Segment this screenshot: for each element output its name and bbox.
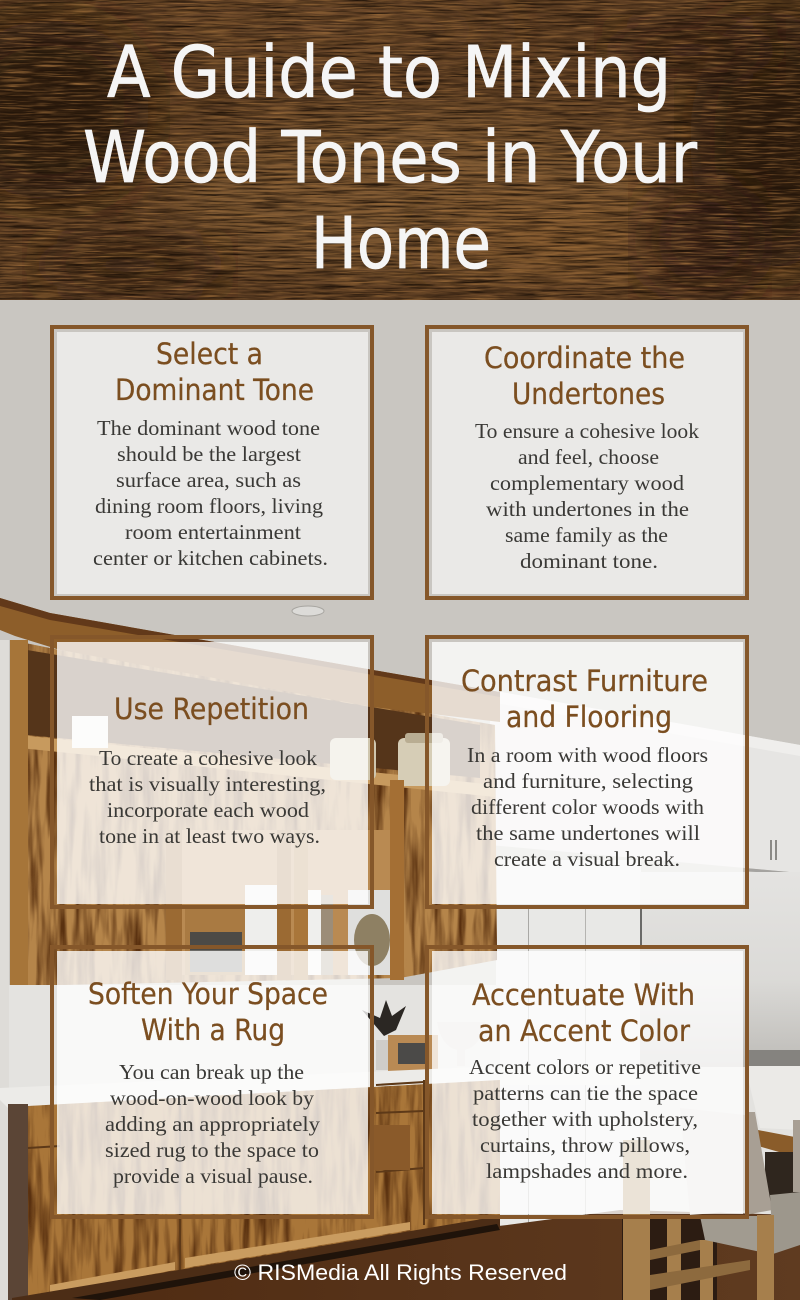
heading: Undertones [512, 377, 665, 411]
lower oak cabinet [0, 1070, 510, 1300]
title: Home [311, 202, 491, 285]
body text: create a visual break. [494, 847, 680, 871]
footer copyright: © RISMedia All Rights Reserved [234, 1260, 567, 1285]
panel: select a dominant tone [52, 327, 372, 598]
body text: should be the largest [117, 442, 301, 466]
body text [93, 416, 328, 570]
heading: and Flooring [506, 700, 672, 734]
body text: tone in at least two ways. [99, 824, 320, 848]
heading: With a Rug [141, 1013, 285, 1047]
heading [115, 337, 314, 407]
title [83, 31, 698, 285]
body text: The dominant wood tone [97, 416, 320, 440]
crown molding [0, 598, 500, 722]
body text: To ensure a cohesive look [475, 419, 700, 443]
body text [89, 746, 326, 848]
body text: surface area, such as [116, 468, 301, 492]
white tall cabinets and stainless fridge [496, 860, 800, 1227]
heading: an Accent Color [478, 1014, 690, 1048]
plant and photo frame [362, 1000, 485, 1072]
bar stools [622, 1108, 800, 1300]
header: wood plank background [0, 0, 800, 300]
body text: different color woods with [471, 795, 705, 819]
body text: center or kitchen cabinets. [93, 546, 328, 570]
body text: complementary wood [490, 471, 685, 495]
heading: Coordinate the [484, 341, 685, 375]
body text: You can break up the [119, 1060, 304, 1084]
body text: and furniture, selecting [483, 769, 694, 793]
heading: Accentuate With [472, 978, 695, 1012]
white upper cabinets, right [490, 690, 800, 876]
heading [461, 664, 708, 734]
body text: wood-on-wood look by [110, 1086, 315, 1110]
body text: lampshades and more. [486, 1159, 688, 1183]
kitchen island counter [745, 1066, 800, 1202]
backsplash [0, 985, 500, 1090]
title: Wood Tones in Your [83, 116, 698, 199]
heading: Use Repetition [114, 692, 309, 726]
heading [88, 977, 328, 1047]
body text: same family as the [505, 523, 668, 547]
cream canisters on shelf [72, 716, 450, 786]
wall and ceiling [0, 300, 800, 1300]
body text [105, 1060, 321, 1188]
panel: soften your space with a rug [52, 947, 372, 1217]
body text: To create a cohesive look [99, 746, 317, 770]
toe kick [12, 1216, 500, 1300]
heading: Contrast Furniture [461, 664, 708, 698]
wood floor [60, 1210, 800, 1300]
body text: dining room floors, living [95, 494, 324, 518]
heading: Soften Your Space [88, 977, 328, 1011]
glass doors [166, 780, 404, 980]
title: A Guide to Mixing [107, 31, 671, 114]
body text: provide a visual pause. [113, 1164, 313, 1188]
body text: In a room with wood floors [467, 743, 708, 767]
body text: dominant tone. [520, 549, 658, 573]
body text: curtains, throw pillows, [480, 1133, 690, 1157]
kitchen photo background [0, 300, 800, 1300]
body text [469, 1055, 701, 1183]
body text: Accent colors or repetitive [469, 1055, 701, 1079]
body text: the same undertones will [476, 821, 700, 845]
heading: Select a [156, 337, 263, 371]
body text: patterns can tie the space [473, 1081, 698, 1105]
left wall strip [0, 640, 9, 1300]
body text: that is visually interesting, [89, 772, 326, 796]
body text [475, 419, 700, 573]
heading [484, 341, 685, 411]
body text [467, 743, 708, 871]
body text: and feel, choose [518, 445, 659, 469]
heading [472, 978, 695, 1048]
dark open shelf [27, 650, 480, 778]
countertop [0, 1066, 640, 1108]
recessed ceiling light [292, 606, 324, 616]
panel: accentuate with an accent color [427, 947, 747, 1217]
body text: with undertones in the [486, 497, 689, 521]
body text: together with upholstery, [472, 1107, 698, 1131]
body text: sized rug to the space to [105, 1138, 319, 1162]
body text: adding an appropriately [105, 1112, 321, 1136]
upper oak cabinet [0, 598, 500, 1000]
panel: coordinate the undertones [427, 327, 747, 598]
body text: incorporate each wood [107, 798, 310, 822]
panel: contrast furniture and flooring [427, 637, 747, 907]
panel: use repetition [52, 637, 372, 907]
side pillar [10, 640, 28, 986]
heading: Dominant Tone [115, 373, 314, 407]
body text: room entertainment [125, 520, 301, 544]
